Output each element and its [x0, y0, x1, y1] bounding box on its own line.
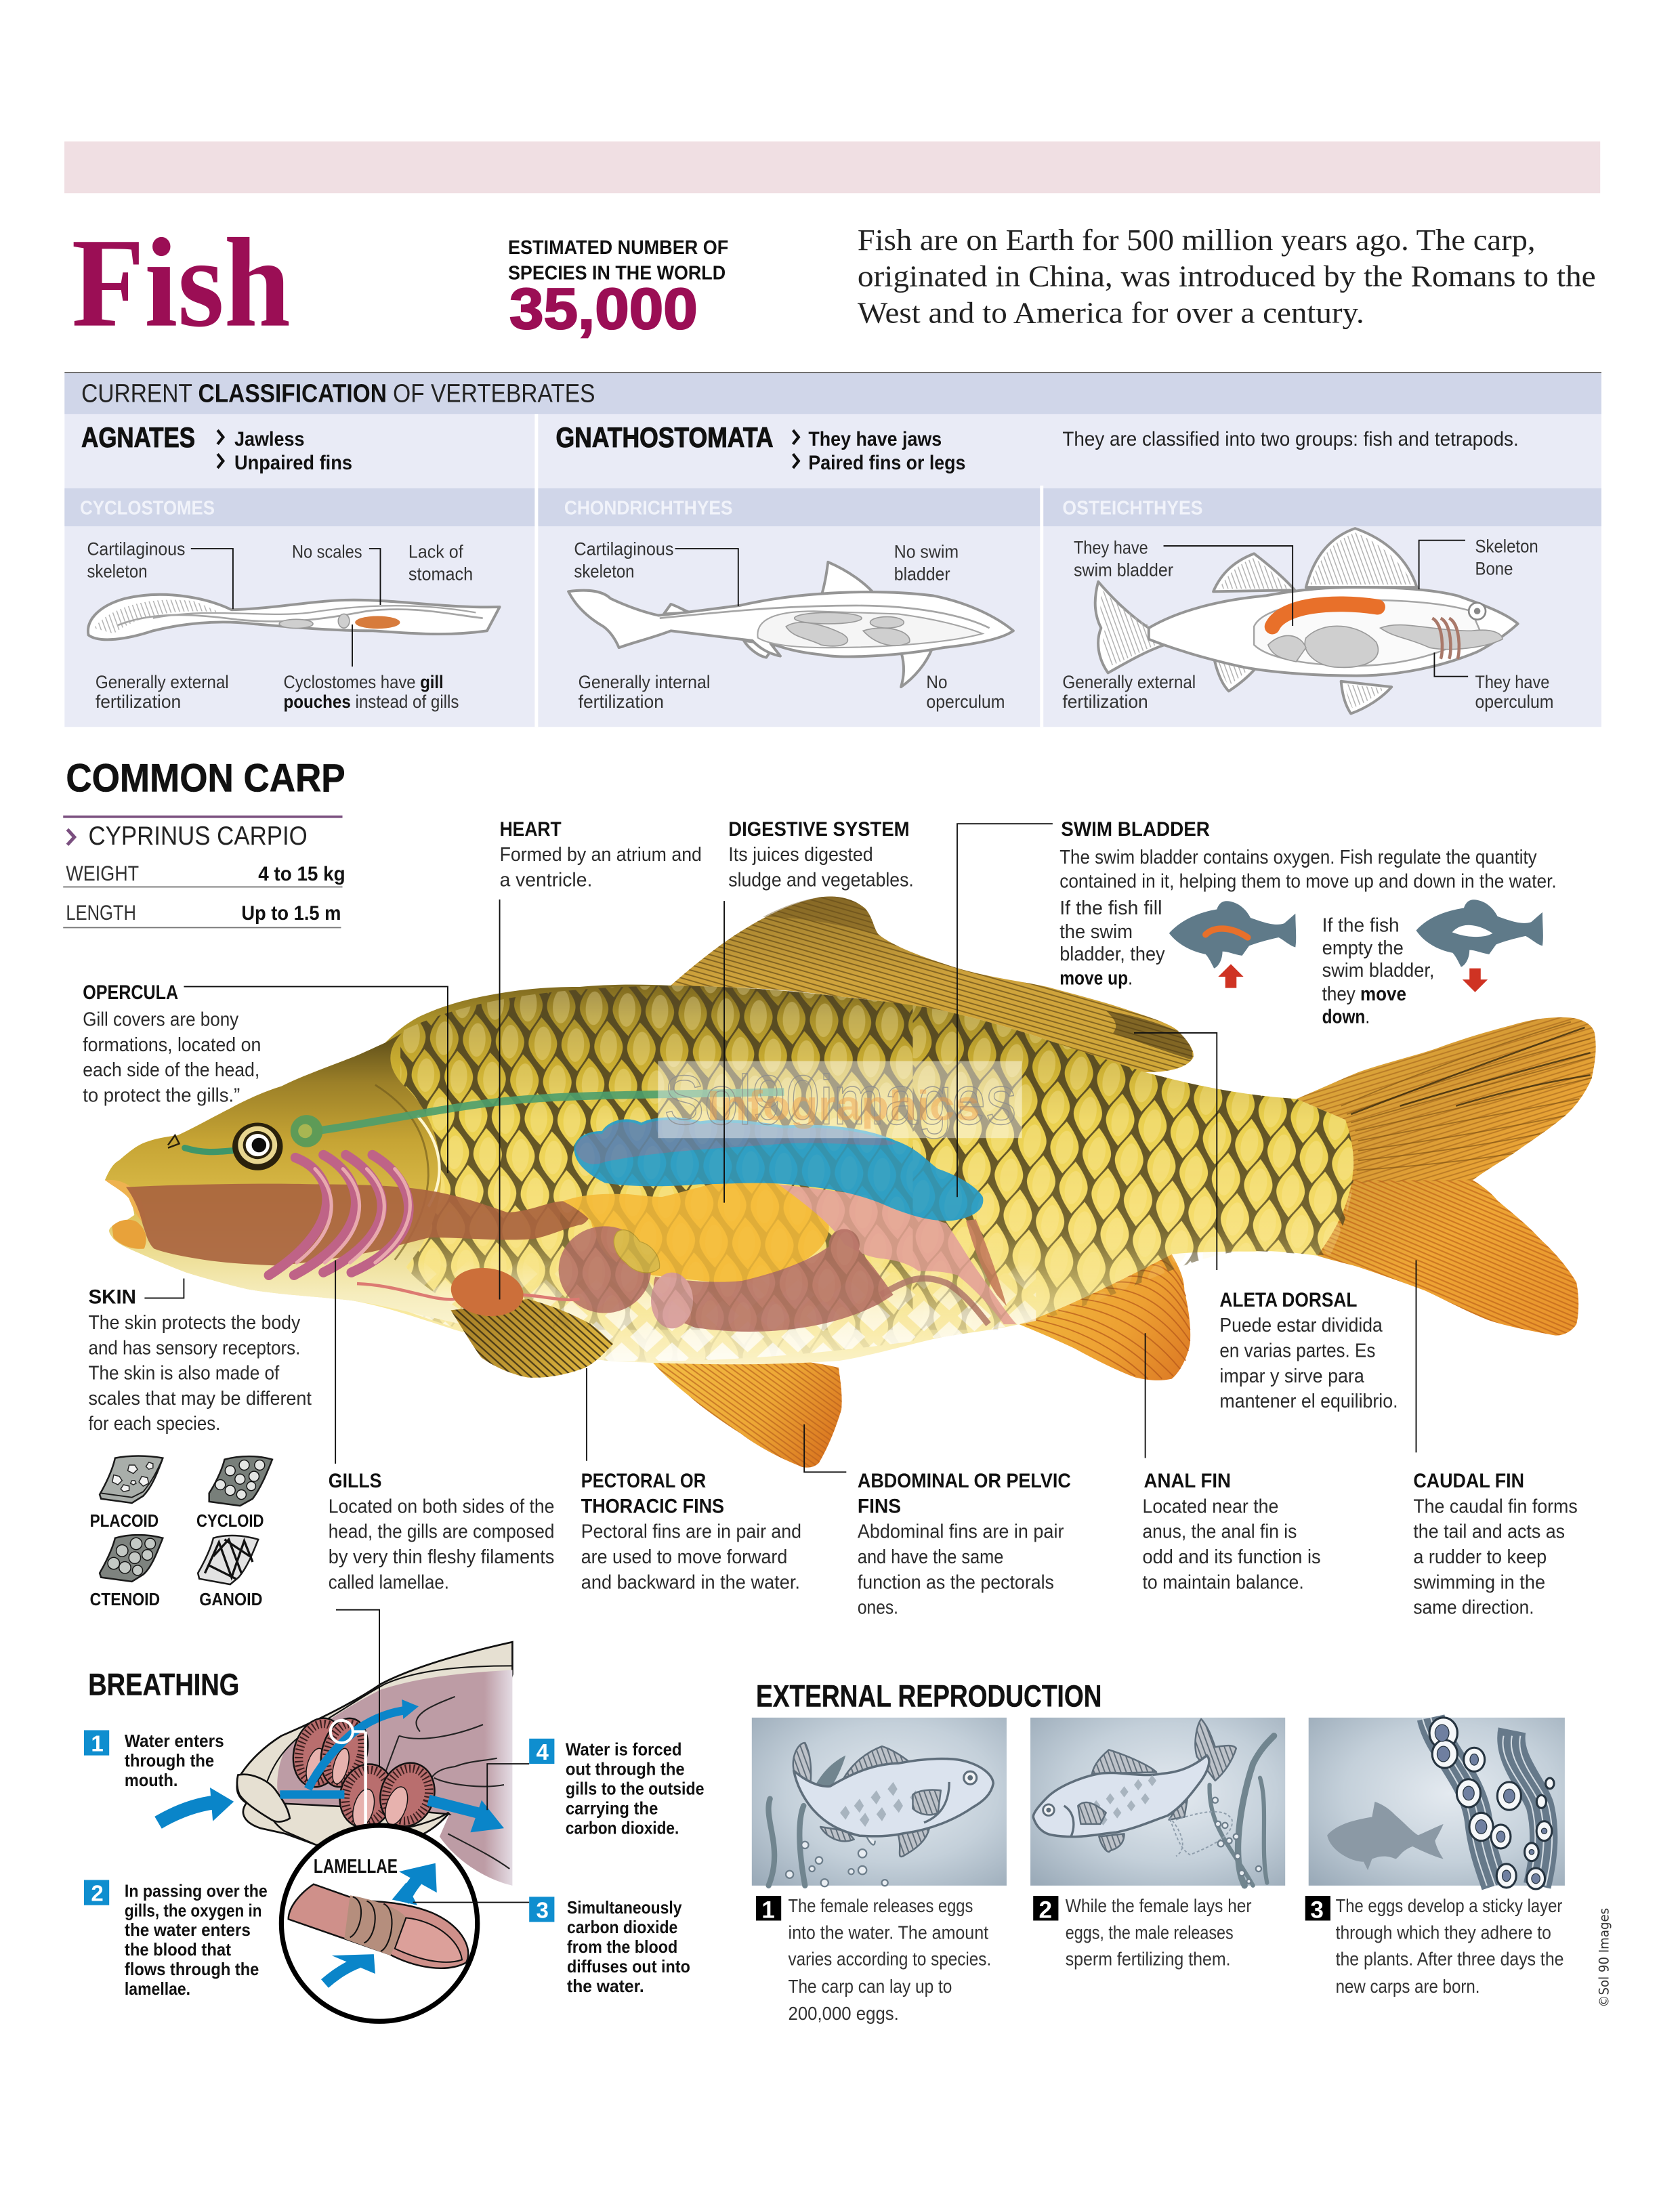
- intro paragraph: Fish are on Earth for 500 million years ago. The carp,: [858, 223, 1536, 257]
- intestines: [559, 1226, 894, 1332]
- eye: [232, 1122, 282, 1170]
- anal fin: [1020, 1254, 1190, 1380]
- pectoral fins label: Pectoral fins are in pair and: [581, 1521, 801, 1543]
- mouth and lips: [105, 1180, 146, 1249]
- digestive system label: Its juices digested: [728, 844, 873, 866]
- step 3: from the blood: [567, 1938, 677, 1957]
- icon: cycloid scale: [209, 1456, 272, 1506]
- step 4: gills to the outside: [566, 1779, 705, 1798]
- caudal fin label: same direction.: [1413, 1597, 1534, 1619]
- gnathostomata block: GNATHOSTOMATA: [555, 421, 774, 453]
- intro paragraph: [858, 223, 1596, 330]
- opercula label: Gill covers are bony: [83, 1009, 239, 1031]
- step 2: In passing over the: [125, 1882, 268, 1901]
- icon: ctenoid scale: [100, 1535, 163, 1582]
- caudal fin label: the tail and acts as: [1413, 1521, 1565, 1543]
- pelvic fins label: [804, 1424, 1071, 1619]
- lamprey labels: Cartilaginous: [87, 538, 185, 559]
- step 3 text: 3: [1310, 1897, 1324, 1923]
- title: Fish: [72, 212, 291, 354]
- reproductive organ: [778, 1184, 1016, 1324]
- skin label: SKIN: [89, 1286, 136, 1309]
- lamprey labels: skeleton: [87, 562, 148, 582]
- step 1 text: into the water. The amount: [789, 1922, 988, 1943]
- step 2: 2: [91, 1882, 104, 1907]
- gnathostomata block: [555, 421, 1519, 474]
- pectoral fins label: are used to move forward: [581, 1546, 787, 1568]
- gills label: Located on both sides of the: [329, 1496, 554, 1517]
- scale types: GANOID: [199, 1590, 262, 1609]
- icon: down arrow: [1463, 969, 1488, 992]
- step 2 text: While the female lays her: [1066, 1895, 1252, 1916]
- shark labels: skeleton: [574, 562, 634, 582]
- arrow: diffusion out: [392, 1863, 437, 1905]
- pelvic fins label: function as the pectorals: [858, 1571, 1054, 1593]
- shark labels: No swim: [894, 542, 959, 562]
- carp body with head: [105, 985, 1353, 1364]
- scale types: CYCLOID: [196, 1512, 264, 1531]
- dorsal fin: [671, 896, 1194, 1072]
- bony fish labels: Generally external: [1062, 672, 1196, 692]
- carp anatomy illustration: [105, 896, 1596, 1468]
- panel: female releases eggs: [752, 1718, 1007, 1886]
- shark labels: [574, 538, 1005, 712]
- pelvic fins label: ones.: [858, 1597, 898, 1619]
- step 3 text: the plants. After three days the: [1336, 1949, 1563, 1970]
- swim bladder callout: If the fish fill: [1059, 897, 1162, 919]
- skin label: for each species.: [89, 1413, 220, 1435]
- shark labels: bladder: [894, 564, 950, 585]
- opercula label: each side of the head,: [83, 1059, 259, 1081]
- esophagus: [126, 1184, 591, 1265]
- arrow: water through gills: [280, 1699, 419, 1794]
- step 3 text: [1305, 1895, 1563, 1997]
- skin label: scales that may be different: [89, 1388, 312, 1410]
- chondrichthyes column: CHONDRICHTHYES: [564, 497, 732, 519]
- swim bladder callout: empty the: [1322, 937, 1404, 959]
- watermark: Infographics: [707, 1082, 980, 1129]
- dorsal fin label: mantener el equilibrio.: [1219, 1391, 1398, 1412]
- panel: male fertilizes: [1030, 1718, 1285, 1886]
- lamprey labels: stomach: [408, 564, 473, 585]
- anal fin label: to maintain balance.: [1142, 1571, 1304, 1593]
- lamprey labels: pouches instead of gills: [284, 692, 459, 712]
- step 4: carbon dioxide.: [566, 1819, 679, 1838]
- step 2: the blood that: [125, 1941, 231, 1960]
- gnathostomata block: They are classified into two groups: fish and tetrapods.: [1062, 428, 1519, 450]
- step 3: 3: [537, 1898, 549, 1923]
- pectoral fins label: and backward in the water.: [581, 1571, 800, 1593]
- step 2 text: eggs, the male releases: [1066, 1922, 1234, 1943]
- lamprey labels: fertilization: [96, 692, 181, 712]
- pelvic fin: [652, 1357, 842, 1468]
- skin label: The skin protects the body: [89, 1312, 301, 1334]
- common carp heading: COMMON CARP: [66, 757, 345, 801]
- swim bladder callout: [957, 818, 1557, 1197]
- anal fin label: Located near the: [1142, 1496, 1278, 1517]
- pelvic fins label: ABDOMINAL OR PELVIC: [858, 1470, 1071, 1492]
- heart label: Formed by an atrium and: [500, 844, 702, 866]
- opercula label: formations, located on: [83, 1034, 261, 1056]
- step 4: [529, 1739, 705, 1838]
- step 4: Water is forced: [566, 1741, 681, 1760]
- pectoral fins label: [581, 1368, 801, 1593]
- copyright: ©Sol 90 Images: [1597, 1908, 1612, 2008]
- lamprey labels: [87, 538, 473, 712]
- cyclostomes column: CYCLOSTOMES: [80, 497, 215, 519]
- step 1 text: The female releases eggs: [789, 1895, 973, 1916]
- gill pointer lines: [336, 1610, 529, 1903]
- bony fish labels: swim bladder: [1074, 560, 1173, 580]
- bony fish labels: They have: [1475, 672, 1549, 692]
- step 4: carrying the: [566, 1799, 658, 1818]
- gill arches: [286, 1712, 442, 1835]
- dorsal fin label: Puede estar dividida: [1219, 1315, 1383, 1336]
- lamprey labels: No scales: [292, 542, 362, 562]
- swim bladder callout: swim bladder,: [1322, 960, 1434, 981]
- species data table: LENGTH: [66, 901, 136, 925]
- chondrichthyes column: [564, 497, 1013, 712]
- heart label: a ventricle.: [500, 869, 592, 891]
- anal fin label: [1142, 1333, 1321, 1593]
- gills label: [329, 1261, 554, 1593]
- intro paragraph: originated in China, was introduced by the Romans to the: [858, 259, 1596, 293]
- pectoral fins label: THORACIC FINS: [581, 1495, 724, 1517]
- scale mesh seen through organs: [553, 1113, 1022, 1337]
- cyclostomes column: [80, 497, 500, 712]
- step 1 text: varies according to species.: [789, 1949, 991, 1970]
- anal fin label: anus, the anal fin is: [1142, 1521, 1297, 1543]
- caudal fin: [1297, 1017, 1596, 1336]
- gills label: GILLS: [329, 1470, 382, 1492]
- step 2 text: [1033, 1895, 1252, 1970]
- swim bladder callout: down.: [1322, 1006, 1370, 1028]
- heart label: [500, 818, 702, 1300]
- scale types: [90, 1456, 272, 1609]
- step 3: diffuses out into: [567, 1958, 690, 1976]
- osteichthyes column: OSTEICHTHYES: [1062, 497, 1203, 519]
- heart: [357, 1263, 580, 1321]
- pelvic fins label: FINS: [858, 1495, 901, 1517]
- bony fish labels: Bone: [1475, 558, 1513, 578]
- step 3: the water.: [567, 1977, 644, 1996]
- head cross-section: [237, 1642, 512, 1886]
- intro paragraph: West and to America for over a century.: [858, 296, 1364, 330]
- lamella: [289, 1884, 468, 1968]
- lamellae label: LAMELLAE: [314, 1856, 398, 1878]
- stomach: [563, 1180, 829, 1282]
- icon: fish sinking: [1416, 900, 1543, 967]
- gnathostomata block: They have jaws: [808, 428, 942, 450]
- step 2: lamellae.: [125, 1980, 190, 1999]
- gnathostomata block: Paired fins or legs: [808, 452, 965, 474]
- icon: fish rising: [1169, 901, 1296, 969]
- species estimate: [508, 237, 728, 341]
- step 2: [84, 1880, 268, 1999]
- opercula label: [83, 981, 448, 1173]
- classification heading: [64, 373, 1601, 414]
- step 1 text: 1: [761, 1897, 775, 1923]
- caudal fin label: [1413, 1261, 1578, 1619]
- step 1 text: [756, 1895, 991, 2024]
- step 1: mouth.: [125, 1771, 177, 1790]
- bony fish labels: fertilization: [1062, 692, 1148, 712]
- lamprey drawing: [88, 595, 500, 639]
- step 3: Simultaneously: [567, 1899, 682, 1918]
- bony fish labels: [1062, 536, 1554, 712]
- species data table: 4 to 15 kg: [258, 863, 345, 885]
- opercula label: to protect the gills.”: [83, 1084, 240, 1106]
- step 3 text: new carps are born.: [1336, 1976, 1479, 1997]
- swim bladder callout: The swim bladder contains oxygen. Fish regulate the quantity: [1059, 847, 1537, 868]
- swim bladder callout: bladder, they: [1059, 944, 1165, 965]
- heart label: HEART: [500, 818, 562, 841]
- shark labels: fertilization: [579, 692, 664, 712]
- panel: eggs stick to plants: [1309, 1718, 1565, 1889]
- skin label: The skin is also made of: [89, 1363, 280, 1384]
- shark labels: operculum: [926, 692, 1005, 712]
- carp head: [105, 1033, 490, 1330]
- swim bladder callout: SWIM BLADDER: [1061, 818, 1210, 841]
- species data table: WEIGHT: [66, 862, 139, 885]
- lateral line with sensory node: [185, 1092, 784, 1152]
- step 3: carbon dioxide: [567, 1918, 677, 1937]
- lamprey labels: Lack of: [408, 542, 463, 562]
- bony fish drawing: [1095, 528, 1518, 714]
- estimate label: SPECIES IN THE WORLD: [508, 262, 726, 284]
- liver: [614, 1230, 660, 1273]
- step 2: the water enters: [125, 1921, 251, 1940]
- digestive system label: [724, 818, 914, 1203]
- step 2 text: 2: [1038, 1897, 1052, 1923]
- shark drawing: [568, 562, 1013, 687]
- step 1: Water enters: [125, 1732, 224, 1751]
- shark labels: Generally internal: [579, 672, 710, 692]
- scale types: PLACOID: [90, 1512, 159, 1531]
- gills label: called lamellae.: [329, 1571, 449, 1593]
- agnates block: Jawless: [234, 428, 305, 450]
- top colour band: [64, 142, 1600, 193]
- digestive system label: DIGESTIVE SYSTEM: [728, 818, 910, 841]
- estimate number: 35,000: [509, 276, 698, 341]
- external reproduction section: [752, 1678, 1565, 2024]
- estimate label: ESTIMATED NUMBER OF: [508, 237, 728, 259]
- swim bladder callout: move up.: [1059, 967, 1133, 989]
- pectoral fin: [450, 1299, 613, 1378]
- gills label: by very thin fleshy filaments: [329, 1546, 554, 1568]
- opercula label: OPERCULA: [83, 981, 178, 1004]
- lamellae magnifier: [281, 1825, 478, 2021]
- step 2: flows through the: [125, 1960, 259, 1979]
- caudal fin label: swimming in the: [1413, 1571, 1545, 1593]
- scale types: CTENOID: [90, 1590, 160, 1609]
- caudal fin label: a rudder to keep: [1413, 1546, 1547, 1568]
- agnates block: AGNATES: [81, 421, 195, 453]
- dorsal fin label: ALETA DORSAL: [1219, 1289, 1357, 1311]
- skin label: and has sensory receptors.: [89, 1337, 300, 1359]
- step 4: 4: [537, 1740, 549, 1765]
- step 3 text: The eggs develop a sticky layer: [1336, 1895, 1562, 1916]
- classification heading: CURRENT CLASSIFICATION OF VERTEBRATES: [81, 379, 595, 408]
- species data table: CYPRINUS CARPIO: [89, 821, 308, 851]
- arrow: water leaving: [428, 1800, 504, 1832]
- lamprey labels: Generally external: [96, 672, 229, 692]
- step 3 text: through which they adhere to: [1336, 1922, 1551, 1943]
- digestive system label: sludge and vegetables.: [728, 869, 914, 891]
- icon: placoid scale: [100, 1456, 163, 1503]
- dorsal fin label: impar y sirve para: [1219, 1366, 1365, 1387]
- swim bladder callout: contained in it, helping them to move up and down in the water.: [1059, 870, 1557, 892]
- watermark: Sol90images: [664, 1061, 1016, 1139]
- bony fish labels: They have: [1074, 537, 1148, 557]
- step 1 text: 200,000 eggs.: [789, 2003, 899, 2024]
- scales: [400, 986, 1353, 1361]
- gills: [269, 1155, 410, 1275]
- estimate label: [508, 237, 728, 284]
- swim bladder callout: they move: [1322, 983, 1406, 1005]
- dorsal fin label: en varias partes. Es: [1219, 1340, 1375, 1361]
- caudal fin label: The caudal fin forms: [1413, 1496, 1578, 1517]
- breathing heading: BREATHING: [88, 1668, 239, 1702]
- icon: ganoid scale: [198, 1536, 258, 1584]
- species data table: Up to 1.5 m: [241, 902, 341, 925]
- swim bladder: [574, 1117, 983, 1221]
- osteichthyes column: [1062, 497, 1554, 714]
- step 4: out through the: [566, 1760, 685, 1779]
- bony fish labels: operculum: [1475, 692, 1554, 712]
- caudal fin label: CAUDAL FIN: [1413, 1470, 1524, 1492]
- reproduction heading: EXTERNAL REPRODUCTION: [756, 1678, 1101, 1713]
- anal fin label: ANAL FIN: [1144, 1470, 1231, 1492]
- icon: up arrow: [1218, 964, 1244, 988]
- arrow: flow in: [324, 1954, 375, 1983]
- bony fish labels: Skeleton: [1475, 536, 1538, 556]
- pelvic fins label: Abdominal fins are in pair: [858, 1521, 1064, 1543]
- step 1: [84, 1730, 224, 1790]
- gills label: head, the gills are composed: [329, 1521, 554, 1543]
- step 1: through the: [125, 1752, 214, 1771]
- step 1 text: The carp can lay up to: [789, 1976, 952, 1997]
- pectoral fins label: PECTORAL OR: [581, 1470, 706, 1492]
- panel: classification of vertebrates: [64, 373, 1601, 727]
- step 2: gills, the oxygen in: [125, 1901, 261, 1920]
- swim bladder callout: the swim: [1059, 921, 1133, 943]
- agnates block: [81, 421, 352, 474]
- step 2 text: sperm fertilizing them.: [1066, 1949, 1231, 1970]
- swim bladder callout: If the fish: [1322, 915, 1400, 937]
- species data table: [63, 817, 345, 927]
- skin label: [89, 1278, 312, 1435]
- shark labels: Cartilaginous: [574, 538, 673, 559]
- shark labels: No: [926, 672, 947, 692]
- step 1: 1: [91, 1731, 104, 1756]
- dorsal fin label: [1134, 1033, 1398, 1412]
- breathing section: [84, 1610, 705, 2021]
- anal fin label: odd and its function is: [1142, 1546, 1321, 1568]
- arrow: water entering mouth: [159, 1788, 234, 1823]
- pelvic fins label: and have the same: [858, 1546, 1003, 1568]
- step 3: [529, 1897, 690, 1996]
- agnates block: Unpaired fins: [234, 452, 352, 474]
- lamprey labels: Cyclostomes have gill: [284, 672, 444, 692]
